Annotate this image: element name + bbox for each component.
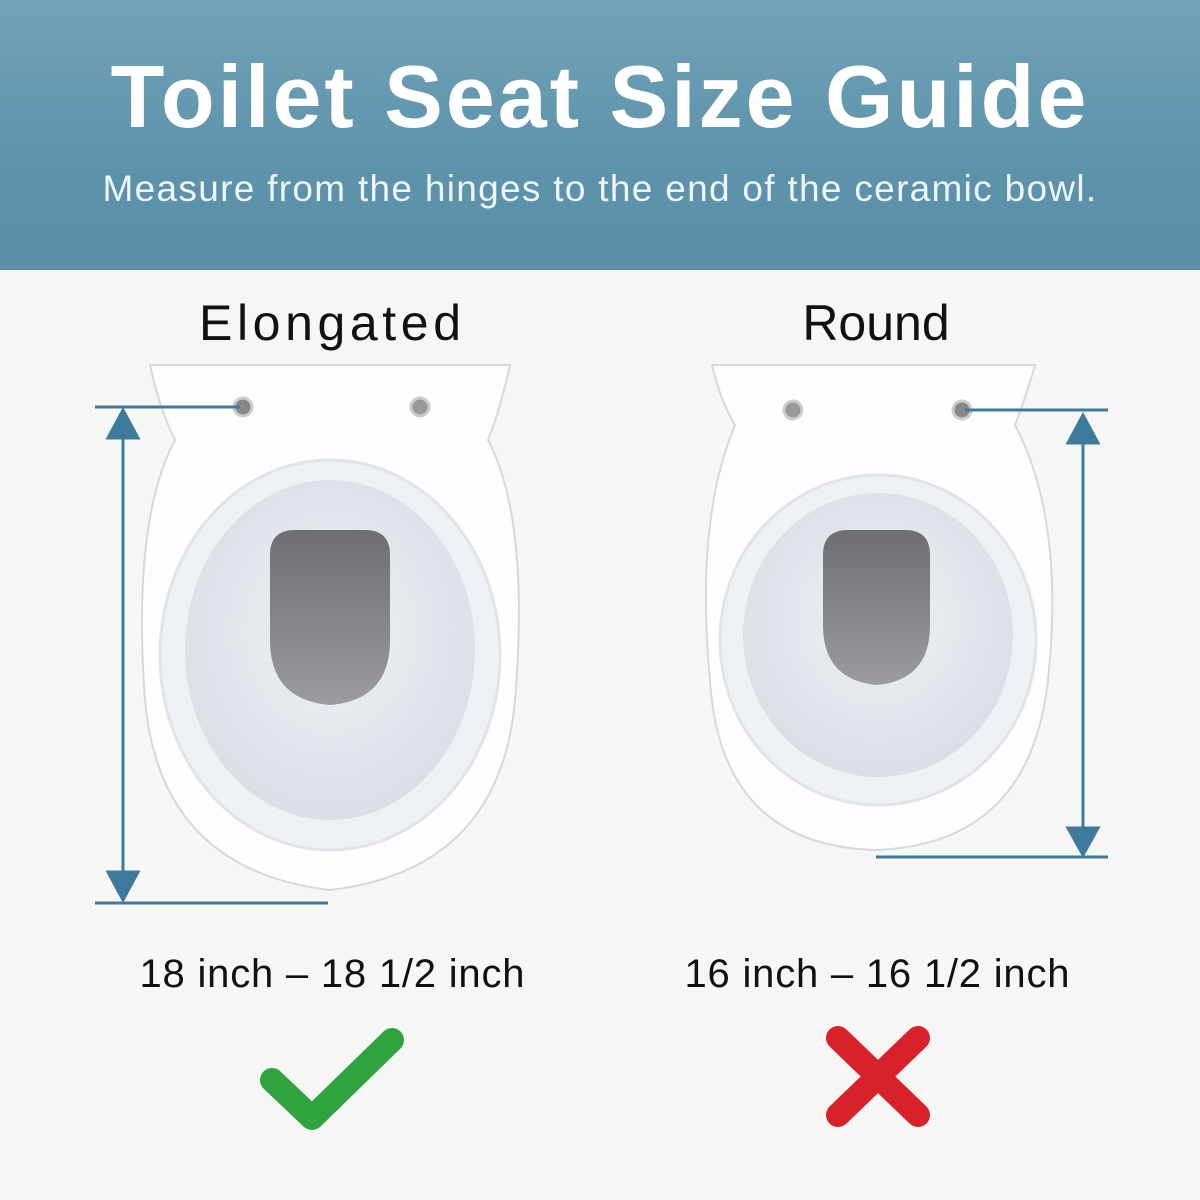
- size text elongated: 18 inch – 18 1/2 inch: [140, 952, 524, 996]
- icon: cross: [838, 1038, 918, 1115]
- toilet: elongated: [142, 365, 519, 890]
- arrow: elongated measurement: [95, 407, 328, 903]
- size text round: 16 inch – 16 1/2 inch: [684, 952, 1070, 996]
- title: Toilet Seat Size Guide: [111, 47, 1089, 146]
- label: Round: Round: [802, 295, 950, 351]
- label: Elongated: Elongated: [199, 295, 461, 351]
- toilet: round: [706, 365, 1052, 850]
- subtitle: Measure from the hinges to the end of the ceramic bowl.: [103, 168, 1097, 209]
- icon: check mark: [272, 1040, 392, 1118]
- header banner: [0, 0, 1200, 270]
- arrow: round measurement: [876, 410, 1108, 857]
